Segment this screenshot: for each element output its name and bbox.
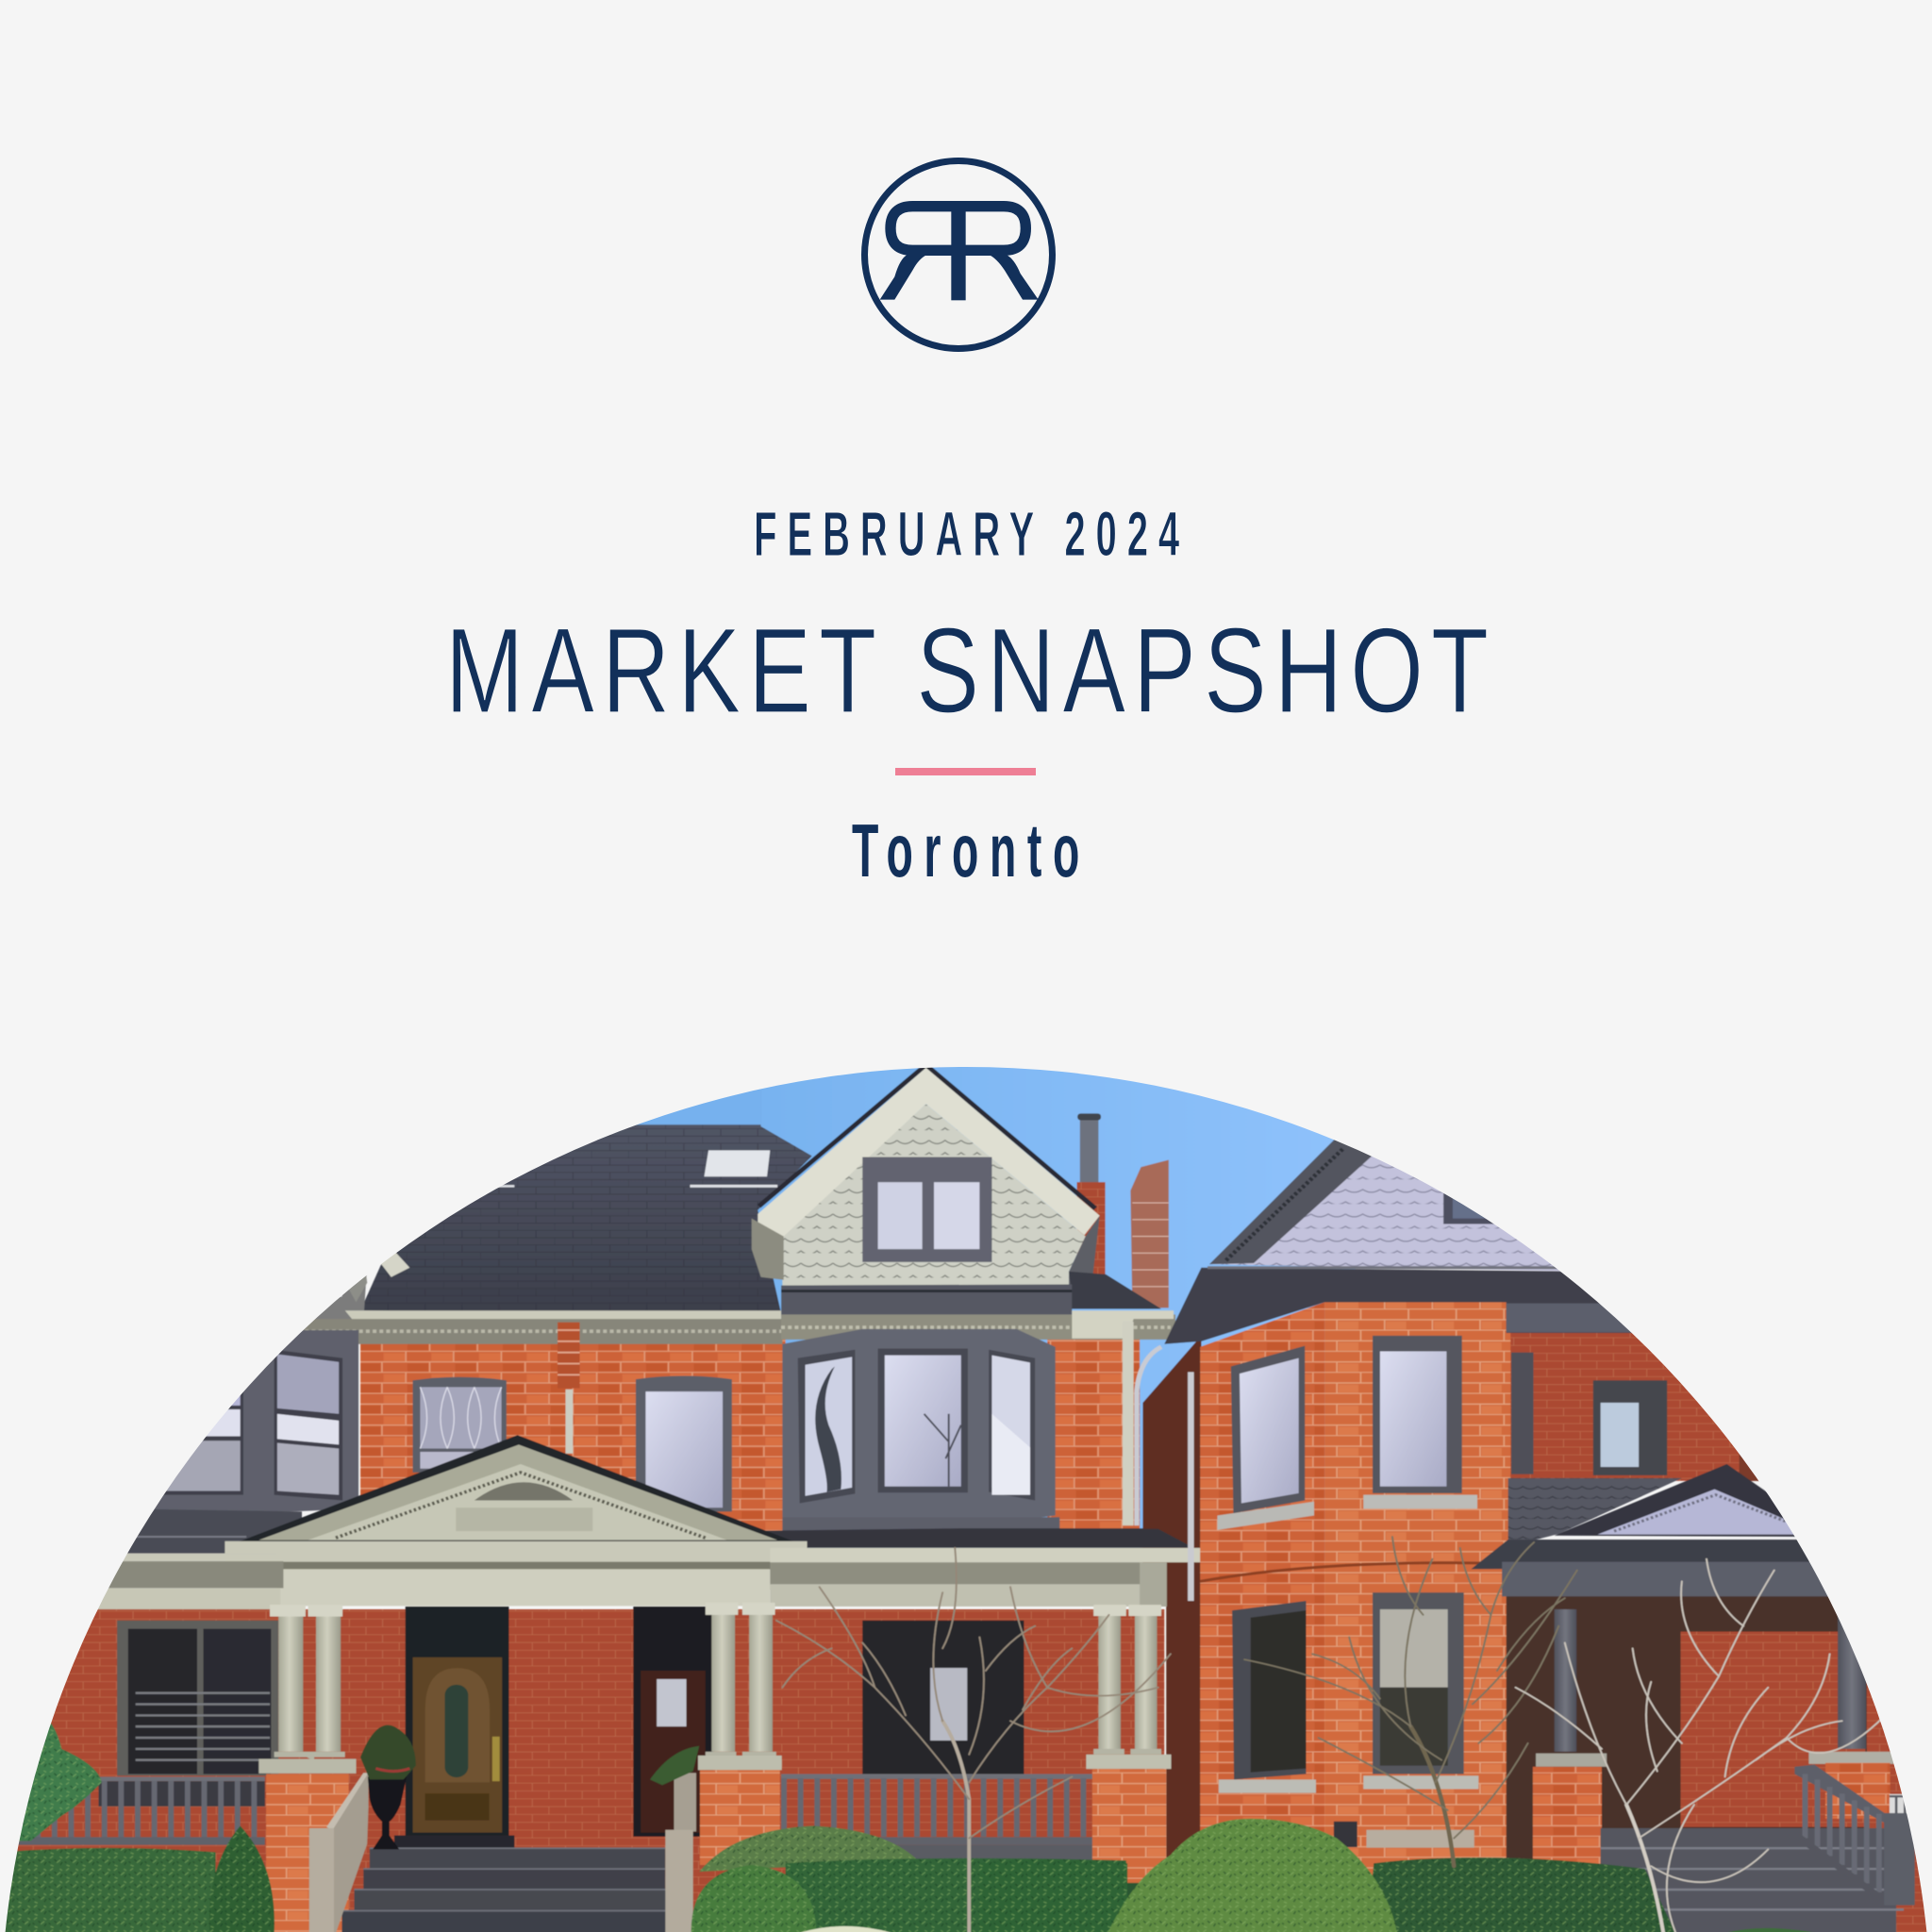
downspouts xyxy=(558,1322,1161,1525)
right house shrubs xyxy=(979,1819,1818,1932)
left bay windows xyxy=(61,1330,358,1554)
second entry door xyxy=(633,1607,713,1837)
left house roof xyxy=(315,1124,812,1320)
right house upper windows xyxy=(1217,1336,1667,1530)
right house stair railing xyxy=(1794,1764,1915,1908)
left house porch wall xyxy=(0,1609,1164,1932)
stair banisters xyxy=(309,1773,696,1932)
central stairs xyxy=(341,1836,669,1932)
right house shaded side wall xyxy=(1142,1336,1201,1883)
photo: brick houses in dome xyxy=(0,1057,1932,1932)
dormer window xyxy=(862,1158,991,1262)
left house porch railings xyxy=(19,1774,1094,1861)
side porch railing beyond stairs xyxy=(1890,1794,1921,1835)
front gable with shingles xyxy=(752,1065,1161,1309)
porch beams xyxy=(98,1540,1141,1609)
chimneys xyxy=(1077,1113,1169,1307)
right house porch xyxy=(1472,1464,1932,1932)
sky xyxy=(757,1067,1355,1529)
right house brick walls xyxy=(1200,1301,1789,1883)
lower roof xyxy=(766,1528,1143,1549)
left porch pediment xyxy=(237,1435,796,1542)
front door xyxy=(406,1607,508,1837)
right house lower windows xyxy=(1219,1592,1478,1848)
bare trees xyxy=(776,1537,1885,1932)
center bay window xyxy=(782,1329,1059,1531)
location subtitle: Toronto xyxy=(852,808,1079,892)
upper walls of left house xyxy=(271,1284,1175,1531)
urn and planter xyxy=(360,1725,699,1849)
lower roof and cornice overlapping side wall xyxy=(1140,1529,1203,1607)
date heading: FEBRUARY 2024 xyxy=(754,498,1179,570)
brick piers xyxy=(266,1769,1166,1932)
left shrubs and tree xyxy=(3,1709,275,1932)
pink divider xyxy=(895,768,1036,775)
right house stairs xyxy=(1601,1828,1904,1932)
left porch columns xyxy=(258,1603,1171,1774)
main title: MARKET SNAPSHOT xyxy=(445,604,1489,739)
logo: RR monogram in circle xyxy=(864,160,1053,349)
arched windows upper left xyxy=(413,1376,732,1511)
right house eaves xyxy=(1164,1268,1663,1601)
center shrubs xyxy=(691,1826,1126,1932)
right house gable xyxy=(1209,1136,1590,1272)
